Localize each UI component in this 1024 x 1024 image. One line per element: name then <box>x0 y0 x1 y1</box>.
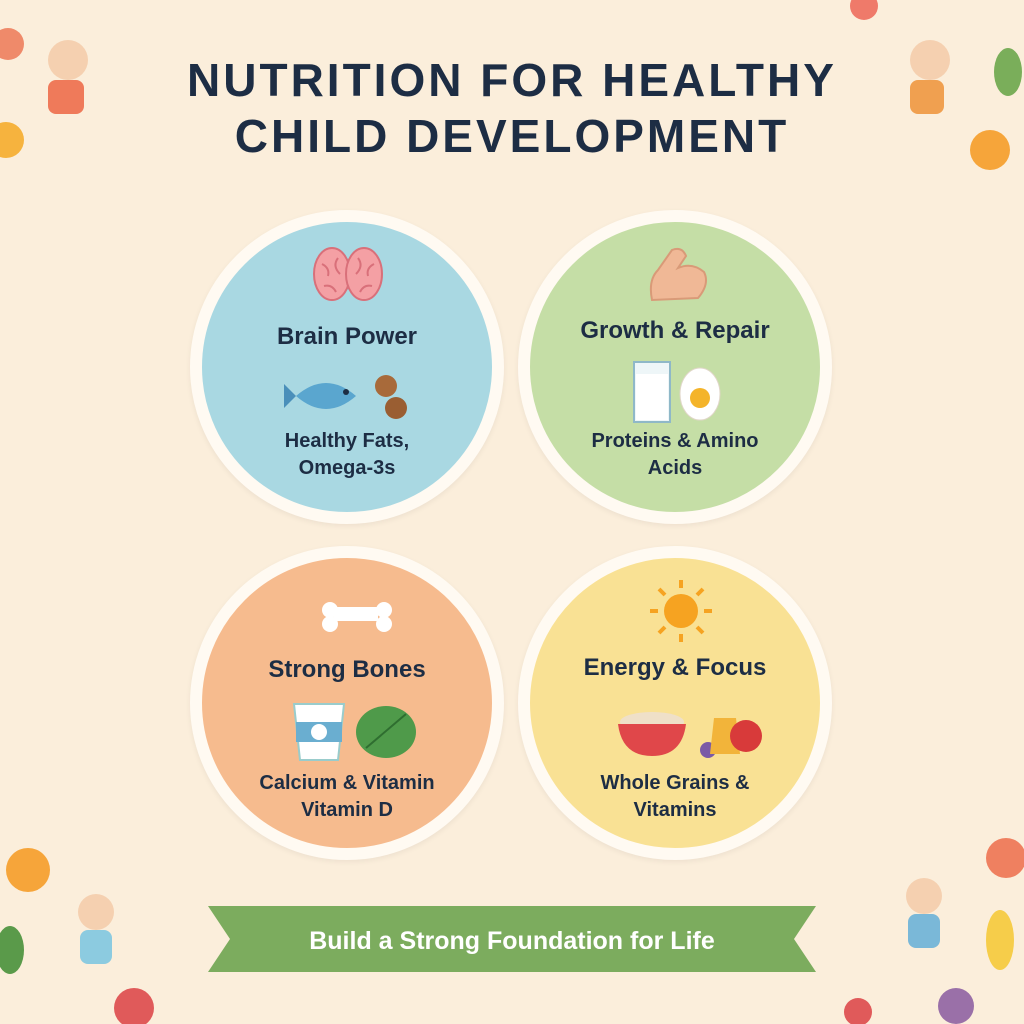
banner: Build a Strong Foundation for Life <box>309 927 715 955</box>
banner <box>208 906 816 972</box>
text: Healthy Fats, <box>285 430 409 452</box>
icon: milk and egg <box>633 361 720 423</box>
text: Vitamin D <box>301 799 393 821</box>
icon: sun <box>650 580 712 642</box>
heading: Growth & Repair <box>580 317 770 344</box>
heading: Strong Bones <box>268 656 426 683</box>
text: Acids <box>648 457 702 479</box>
icon: brain <box>313 247 383 301</box>
title: CHILD DEVELOPMENT <box>235 110 789 162</box>
panel: energy & focus <box>518 546 832 860</box>
text: Calcium & Vitamin <box>259 772 435 794</box>
title <box>187 54 837 162</box>
icon: fish and walnuts <box>284 375 407 419</box>
panel: brain power <box>190 210 504 524</box>
heading: Brain Power <box>277 323 417 350</box>
text <box>591 430 759 479</box>
text <box>285 430 409 479</box>
text: Omega-3s <box>299 457 395 479</box>
text: Proteins & Amino <box>591 430 759 452</box>
icon: bowl and fruits <box>618 712 762 758</box>
text: Vitamins <box>634 799 716 821</box>
heading: Energy & Focus <box>584 654 766 681</box>
text: Whole Grains & <box>601 772 749 794</box>
panel: strong bones <box>190 546 504 860</box>
panel: growth & repair <box>518 210 832 524</box>
icon: arm <box>650 248 707 301</box>
title: NUTRITION FOR HEALTHY <box>187 54 837 106</box>
icon: yogurt and spinach <box>292 703 416 761</box>
icon: bone <box>322 602 392 632</box>
text <box>600 772 749 821</box>
text <box>259 772 435 821</box>
